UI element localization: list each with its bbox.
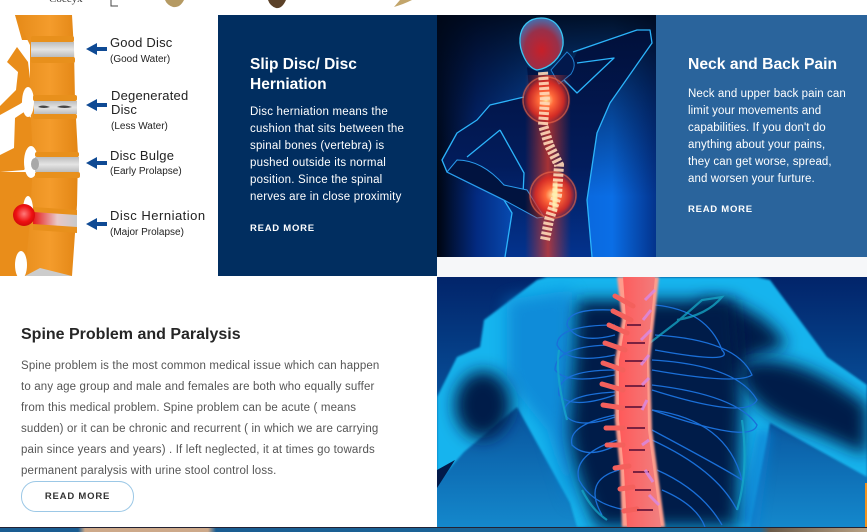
disc labels: (Major Prolapse) xyxy=(110,227,184,238)
text: slip disc body: Disc herniation means the xyxy=(250,106,388,118)
white foramina xyxy=(0,87,38,279)
top strip: cropped anatomy chart xyxy=(49,0,412,8)
text: neck and back body: anything about your pains, xyxy=(688,139,825,151)
text: slip disc body: pushed outside its normal xyxy=(250,157,386,169)
text: slip disc body: nerves are in close proximity xyxy=(250,191,402,203)
text: neck and back body: limit your movements and xyxy=(688,105,821,117)
link: read more: READ MORE xyxy=(250,223,315,234)
disc labels: Disc Bulge xyxy=(110,148,174,163)
text: slip disc body: position. Since the spinal xyxy=(250,174,382,186)
disc labels: (Less Water) xyxy=(111,121,168,132)
panel: spine problem and paralysis xyxy=(0,277,437,527)
vertebral column xyxy=(15,15,78,276)
text: spine problem body xyxy=(21,360,379,477)
orange corner tab xyxy=(865,483,867,527)
image: back anatomy with highlighted spine xyxy=(437,277,867,527)
spine processes xyxy=(0,15,40,276)
text: spine problem body: sudden) or it can be chronic and recurrent ( in which we are carrying xyxy=(21,423,378,435)
disc labels: Disc Herniation xyxy=(110,208,206,223)
image: man with back and neck pain xyxy=(437,15,656,257)
red spine xyxy=(602,277,665,527)
spine glow xyxy=(525,75,571,257)
text: slip disc body: spinal bones (vertebra) is xyxy=(250,140,384,152)
text: spine problem body: from this medical problem. Spine problem can be acute ( means xyxy=(21,402,356,414)
disc labels: Degenerated xyxy=(111,88,188,103)
panel: neck and back pain xyxy=(656,15,867,257)
torso and arms xyxy=(437,277,867,527)
arrows xyxy=(86,43,107,230)
decorative strip xyxy=(437,257,867,277)
panel: slip disc xyxy=(218,15,437,276)
text: neck and back body: capabilities. If you don't do xyxy=(688,122,826,134)
link: read more: READ MORE xyxy=(688,204,753,215)
heading: slip disc: Slip Disc/ Disc xyxy=(250,56,357,73)
text: spine problem body: Spine problem is the most common medical issue which can happen xyxy=(21,360,379,372)
dark muscle shading xyxy=(437,300,867,527)
disc labels: (Early Prolapse) xyxy=(110,166,182,177)
button: read more: READ MORE xyxy=(45,491,110,502)
disc labels: Good Disc xyxy=(110,35,173,50)
text: neck and back body xyxy=(688,88,846,185)
text: slip disc body xyxy=(250,106,404,203)
heading: slip disc xyxy=(250,56,357,93)
disc labels: Disc xyxy=(111,102,137,117)
discs xyxy=(13,36,80,276)
text: spine problem body: pain since years and years) . If left neglected, it at times go towards xyxy=(21,444,375,456)
text: neck and back body: they can get worse, spread, xyxy=(688,156,832,168)
button: read more xyxy=(21,481,134,512)
heading: slip disc: Herniation xyxy=(250,76,327,93)
disc labels: (Good Water) xyxy=(110,54,170,65)
heading: neck and back pain: Neck and Back Pain xyxy=(688,56,837,73)
text: neck and back body: Neck and upper back pain can xyxy=(688,88,846,100)
panel: disc types diagram xyxy=(0,15,218,276)
text: neck and back body: and worsen your furture. xyxy=(688,173,815,185)
heading: spine problem: Spine Problem and Paralysis xyxy=(21,326,241,343)
text: slip disc body: cushion that sits between the xyxy=(250,123,404,135)
head xyxy=(520,18,563,70)
body silhouette xyxy=(442,30,652,257)
mid-tone body shading xyxy=(507,290,772,527)
hand on lower back xyxy=(447,160,544,218)
text: spine problem body: to any age group and male and females are both who equally suffer xyxy=(21,381,374,393)
hand on neck xyxy=(551,52,574,84)
spine vertebrae xyxy=(543,72,559,240)
disc labels xyxy=(110,35,206,238)
text: spine problem body: permanent paralysis with urine stool control loss. xyxy=(21,465,277,477)
ribs xyxy=(555,305,757,527)
bottom strip xyxy=(0,527,867,532)
